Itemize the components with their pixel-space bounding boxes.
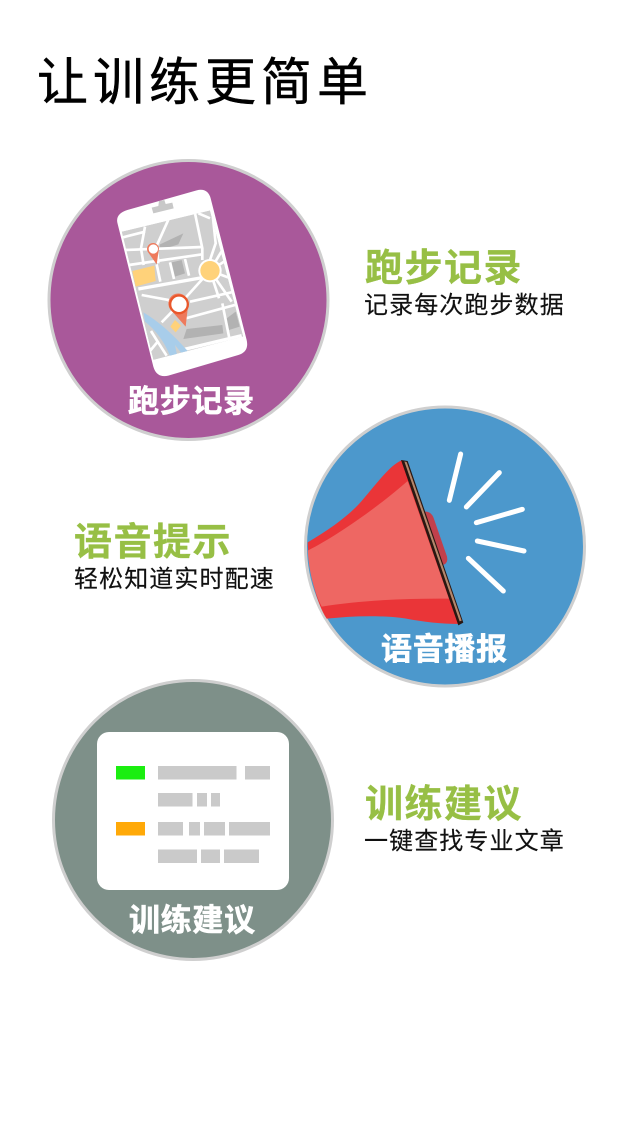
text: voice prompt description: 轻松知道实时配速: [74, 566, 275, 593]
heading: training advice: 训练建议: [365, 784, 523, 826]
circle: blue badge: [306, 407, 584, 686]
label: badge caption: 训练建议: [129, 903, 256, 938]
title: 让训练更简单: [37, 54, 373, 111]
heading: running record: 跑步记录: [365, 248, 523, 290]
panel: voice broadcast: [306, 407, 584, 686]
text: training advice description: 一键查找专业文章: [364, 828, 565, 855]
text: running record description: 记录每次跑步数据: [364, 292, 565, 319]
panel: running record: [49, 160, 328, 440]
circle: grey-green badge: [54, 680, 332, 960]
icon: phone with map: [117, 190, 247, 376]
circle: purple badge: [49, 160, 328, 440]
icon: article card: [97, 732, 289, 890]
label: badge caption: 语音播报: [381, 632, 508, 667]
panel: training advice: [54, 680, 332, 960]
tag: orange: [116, 822, 145, 836]
tag: green: [116, 766, 145, 780]
label: badge caption: 跑步记录: [128, 384, 255, 419]
icon: megaphone: [308, 454, 524, 625]
heading: voice prompt: 语音提示: [74, 522, 232, 564]
